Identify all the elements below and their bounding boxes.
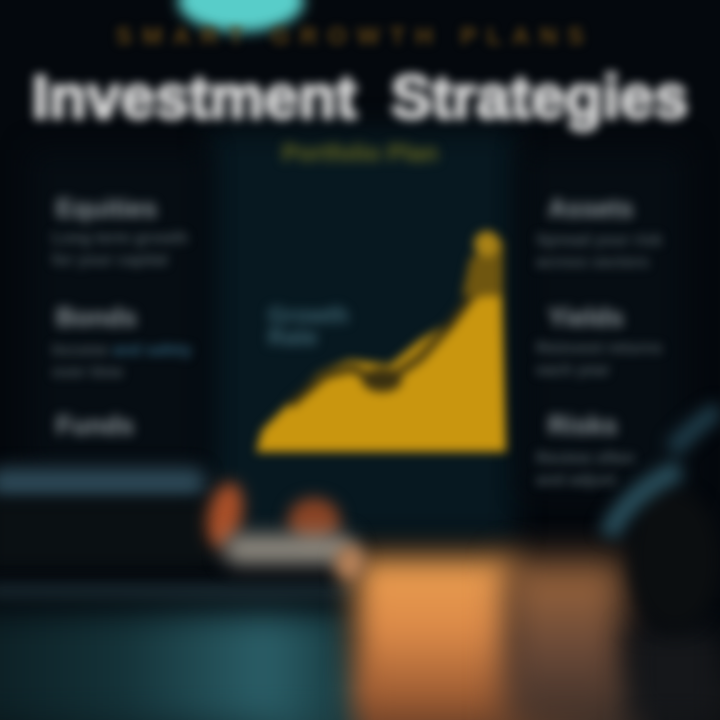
chart top peak <box>462 240 503 296</box>
paper corner <box>335 545 365 581</box>
left column text <box>50 192 194 441</box>
right item 3 heading: Risks <box>548 410 617 440</box>
left item 1 detail: Long term growth <box>52 230 188 247</box>
chart label <box>264 302 352 350</box>
chart dark notch <box>362 368 402 392</box>
subtitle: Portfolio Plan <box>282 140 438 167</box>
chart arrow head <box>474 231 500 257</box>
left item 2 detail <box>50 340 194 381</box>
right item 2 detail: each year <box>536 362 610 379</box>
right item 1 heading: Assets <box>548 193 633 223</box>
laptop top <box>0 468 205 498</box>
left item 1 heading: Equities <box>56 193 157 223</box>
left item 1 detail <box>50 229 190 270</box>
chart trend line <box>290 270 478 405</box>
right item 1 detail: Spread your risk <box>536 232 662 249</box>
left item 2 detail: over time <box>52 364 123 381</box>
hand left <box>202 479 248 551</box>
right column text <box>533 193 664 490</box>
glowing lamp <box>168 0 314 44</box>
right item 2 heading: Yields <box>548 302 624 332</box>
desk base <box>0 582 355 600</box>
left item 1 detail: for your capital <box>52 252 168 269</box>
left item 2 detail: Income and safety <box>52 342 192 359</box>
right item 3 detail: Review often <box>536 450 635 467</box>
floor orange glow <box>355 556 515 720</box>
hand right <box>288 498 340 544</box>
right item 3 detail <box>533 448 636 490</box>
right item 2 detail: Reinvest returns <box>536 340 662 357</box>
chair body <box>630 490 720 630</box>
right item 1 detail: across sectors <box>536 254 649 271</box>
eyebrow text: SMART GROWTH PLANS <box>116 23 594 50</box>
floor base strip <box>10 660 720 720</box>
right item 2 detail <box>533 338 664 380</box>
right item 3 detail: and adjust <box>536 472 616 489</box>
background: left panel <box>30 150 205 470</box>
right item 1 detail <box>534 232 664 271</box>
chair rim upper <box>672 410 720 450</box>
chart label: Rate <box>268 324 318 350</box>
floor bottom right <box>630 630 720 720</box>
background: right panel <box>525 150 685 490</box>
floor teal <box>0 612 350 720</box>
chair rim lower <box>608 470 680 535</box>
left item 3 heading: Funds <box>56 410 134 440</box>
paper <box>224 534 354 564</box>
left item 2 heading: Bonds <box>56 302 137 332</box>
chart label: Growth <box>268 302 348 328</box>
background: centre panel <box>210 130 515 540</box>
title: Investment Strategies <box>32 63 688 132</box>
chart area <box>256 292 506 452</box>
floor right fade <box>505 560 625 720</box>
laptop body <box>0 500 215 568</box>
